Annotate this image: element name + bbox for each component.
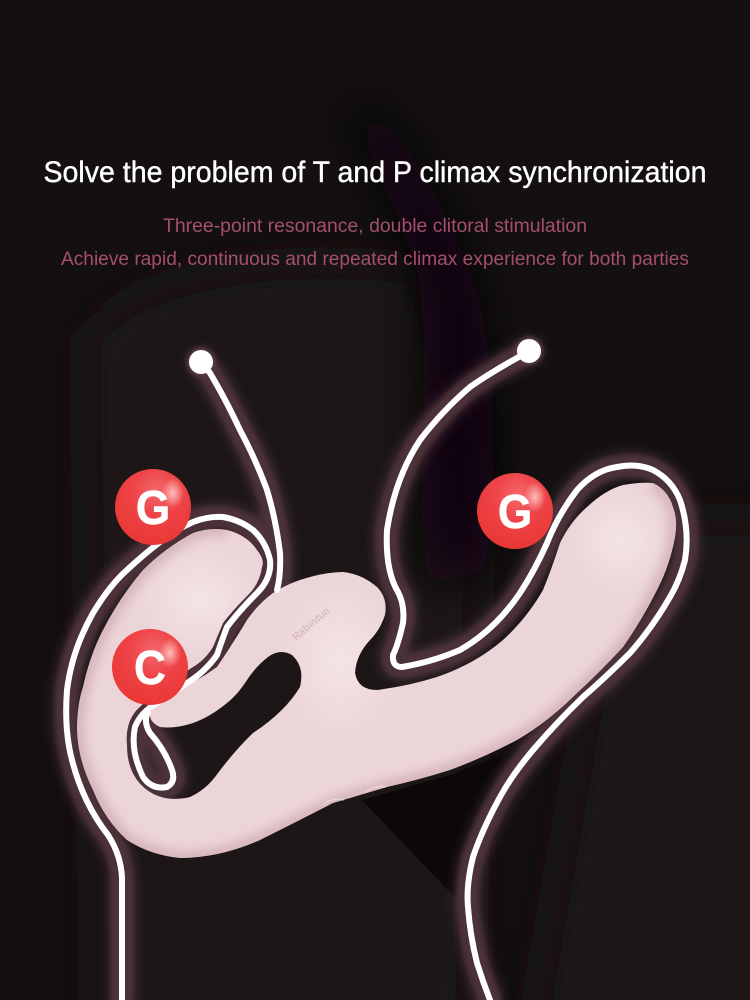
product body	[77, 482, 676, 858]
left outline with loop	[66, 517, 270, 1000]
marker: G right: G	[498, 484, 532, 538]
title: Solve the problem of T and P climax synchronization	[44, 156, 706, 189]
left pointer line	[189, 350, 280, 590]
subtitle line 2: Achieve rapid, continuous and repeated climax experience for both parties	[61, 249, 689, 270]
right pointer line and outline	[387, 339, 687, 1000]
marker: C	[112, 629, 188, 705]
marker: G left: G	[136, 480, 170, 534]
marker: G right	[477, 473, 553, 549]
outline glow	[66, 337, 687, 1000]
marker: C: C	[134, 640, 166, 694]
subtitle line 1: Three-point resonance, double clitoral stimulation	[163, 216, 587, 237]
button marks	[323, 787, 386, 805]
brand mark on product: Rabinfun	[290, 605, 333, 643]
marker: G left	[115, 469, 191, 545]
